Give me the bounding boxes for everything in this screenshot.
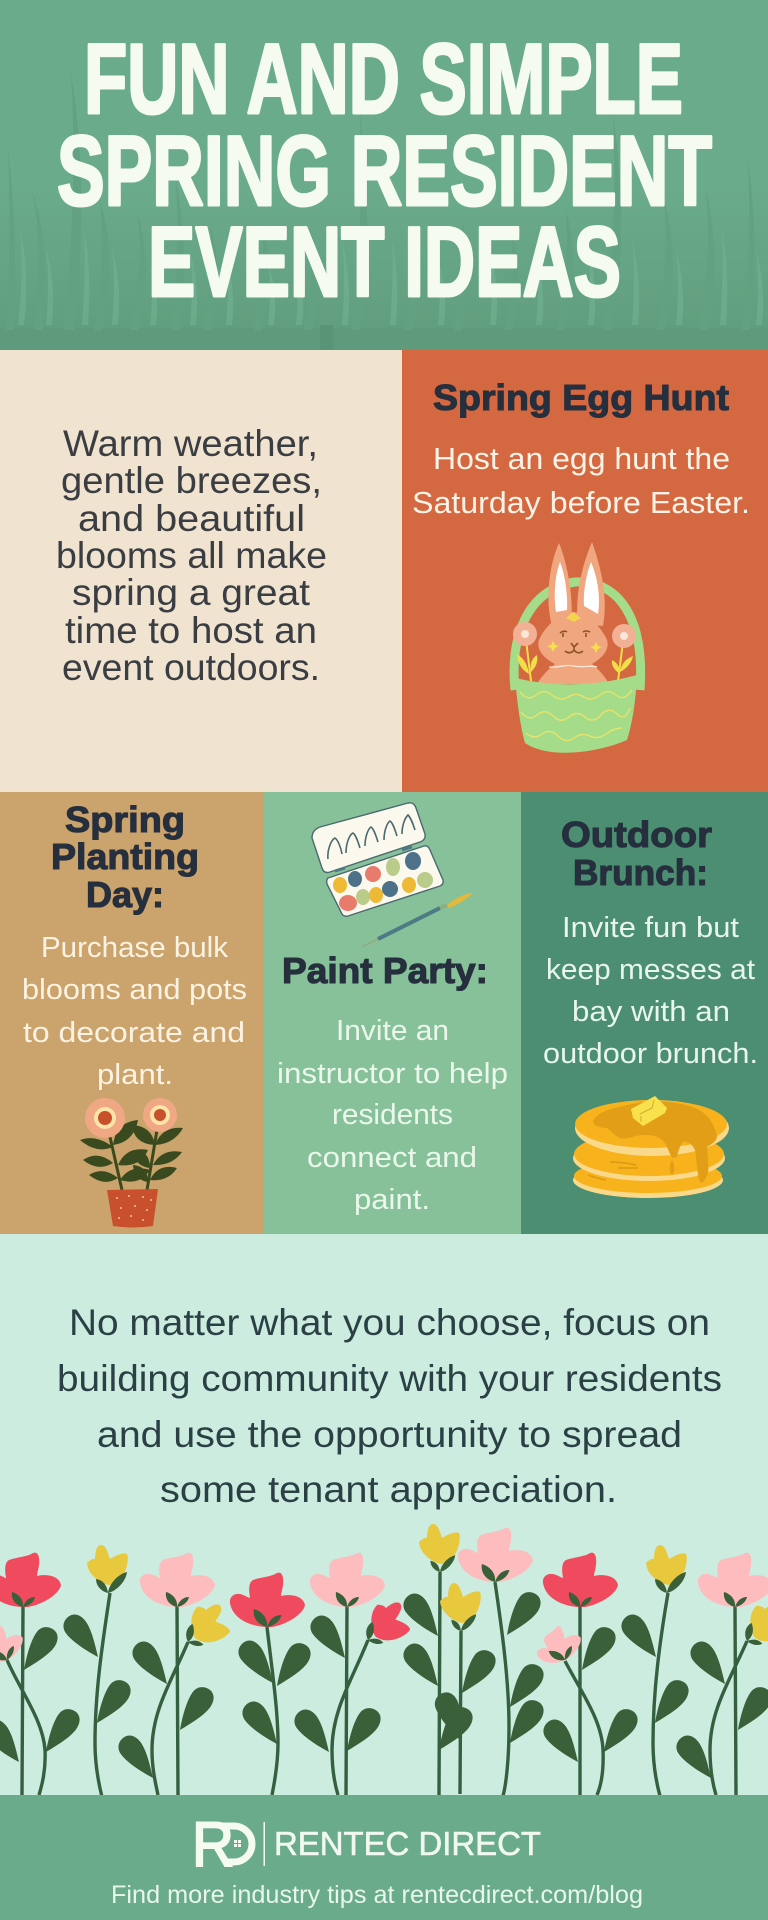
intro paragraph: Warm weather, — [63, 423, 318, 464]
heading: paint party: Paint Party: — [282, 950, 488, 991]
description: planting day: blooms and pots — [22, 974, 247, 1006]
logo: rentec direct — [192, 1810, 541, 1880]
panel: spring egg hunt — [402, 350, 768, 792]
closing paragraph: some tenant appreciation. — [160, 1469, 617, 1510]
panel: outdoor brunch — [521, 792, 768, 1234]
leaves — [0, 1587, 768, 1785]
intro paragraph: blooms all make — [56, 535, 327, 576]
panel: paint party — [264, 792, 521, 1234]
closing paragraph: No matter what you choose, focus on — [69, 1302, 710, 1343]
heading: spring planting day: Spring — [65, 799, 185, 840]
logo: rentec direct: R — [192, 1810, 234, 1880]
intro paragraph: spring a great — [72, 572, 311, 613]
heading: spring egg hunt: Spring Egg Hunt — [433, 377, 729, 418]
description: outdoor brunch: Invite fun but — [562, 912, 739, 944]
description: egg hunt: Host an egg hunt the — [433, 441, 730, 476]
icon: watercolor palette and brush — [312, 803, 473, 947]
title — [57, 23, 712, 317]
description: planting day: Purchase bulk — [41, 932, 228, 964]
heading: outdoor brunch: Outdoor — [561, 814, 712, 855]
icon: potted flowers — [80, 1098, 183, 1228]
description: planting day: plant. — [97, 1059, 173, 1091]
description: paint party: connect and — [307, 1142, 477, 1174]
panel: footer — [0, 1795, 768, 1920]
pink flowers — [0, 1528, 768, 1670]
footer link text: Find more industry tips at rentecdirect.com/blog — [111, 1881, 643, 1909]
intro paragraph: and beautiful — [78, 498, 305, 539]
icon: pancakes with butter and syrup — [573, 1096, 729, 1198]
description: planting day — [22, 932, 247, 1091]
heading: spring planting day — [51, 799, 199, 915]
description: egg hunt: Saturday before Easter. — [412, 485, 750, 520]
description: planting day: to decorate and — [23, 1017, 245, 1049]
closing paragraph — [57, 1302, 722, 1510]
closing paragraph: building community with your residents — [57, 1358, 722, 1399]
panel: spring planting day — [0, 792, 264, 1234]
panel: intro text — [0, 350, 402, 792]
description: paint party: instructor to help — [277, 1058, 508, 1090]
description: paint party — [277, 1015, 508, 1216]
description: paint party: Invite an — [336, 1015, 449, 1047]
intro paragraph: event outdoors. — [62, 647, 320, 688]
heading: outdoor brunch: Brunch: — [573, 852, 708, 893]
description: outdoor brunch — [543, 912, 758, 1070]
description: paint party: residents — [332, 1099, 453, 1131]
flower calyxes — [0, 1555, 766, 1665]
description: outdoor brunch: keep messes at — [546, 954, 755, 986]
illustration: row of spring flowers — [0, 1524, 768, 1797]
red flowers — [0, 1553, 618, 1650]
intro paragraph: gentle breezes, — [61, 460, 322, 501]
description: egg hunt — [412, 441, 750, 520]
panel: header with grass — [0, 0, 768, 351]
logo: rentec direct: RENTEC DIRECT — [274, 1825, 541, 1862]
intro paragraph — [56, 423, 327, 688]
heading: outdoor brunch — [561, 814, 712, 893]
description: paint party: paint. — [354, 1184, 430, 1216]
icon: bunny in basket — [513, 542, 641, 753]
closing paragraph: and use the opportunity to spread — [97, 1414, 682, 1455]
intro paragraph: time to host an — [65, 610, 317, 651]
heading: spring planting day: Day: — [86, 874, 164, 915]
description: outdoor brunch: outdoor brunch. — [543, 1038, 758, 1070]
panel: closing message — [0, 1234, 768, 1797]
heading: spring planting day: Planting — [51, 836, 199, 877]
description: outdoor brunch: bay with an — [572, 996, 730, 1028]
yellow tulips — [87, 1524, 768, 1652]
